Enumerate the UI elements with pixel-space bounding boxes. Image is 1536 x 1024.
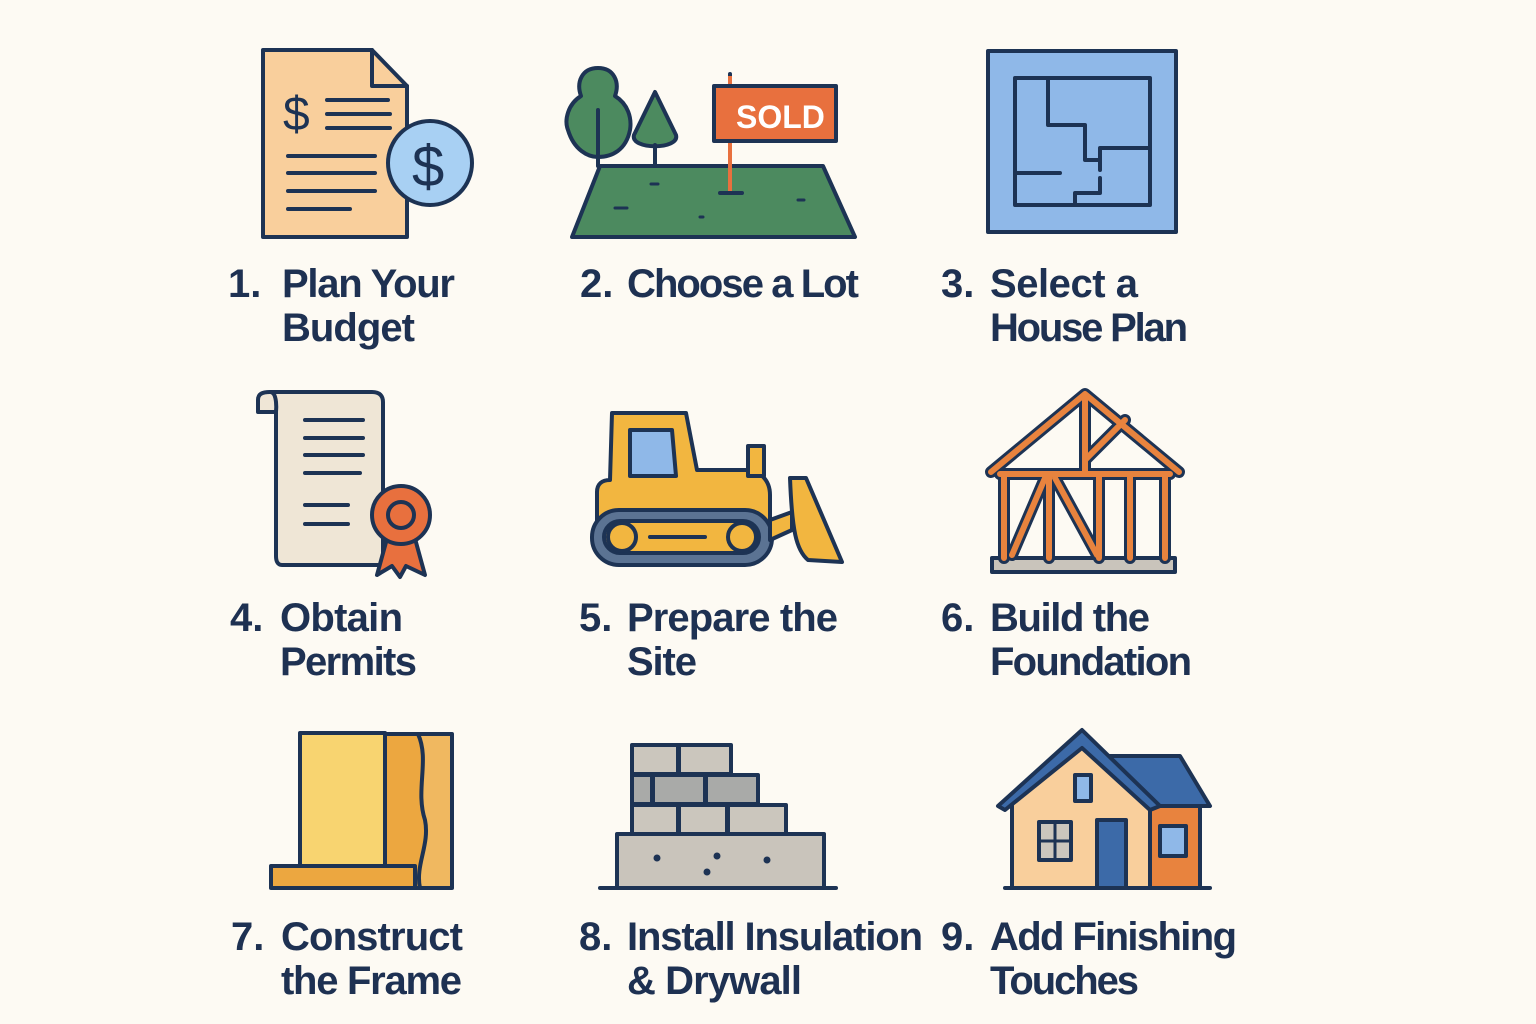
- label: step 4: Obtain: [280, 596, 403, 640]
- label: step 6: Build the: [990, 596, 1150, 640]
- label: step 8: & Drywall: [627, 959, 802, 1003]
- icon: budget document: $: [283, 88, 310, 141]
- icon: house frame: [991, 394, 1179, 572]
- label: step 4: 4.: [230, 596, 263, 640]
- label: step 6: Foundation: [990, 640, 1192, 684]
- label: step 9: Add Finishing: [990, 915, 1237, 959]
- label: step 1: [228, 262, 455, 350]
- label: step 3: 3.: [941, 262, 974, 306]
- label: step 6: [941, 596, 1192, 684]
- label: step 7: the Frame: [281, 959, 462, 1003]
- label: step 8: Install Insulation: [627, 915, 923, 959]
- icon: budget document: [263, 50, 472, 237]
- label: step 9: Touches: [990, 959, 1139, 1003]
- label: step 3: [941, 262, 1188, 350]
- label: step 5: Prepare the: [627, 596, 838, 640]
- icon: bulldozer: [592, 413, 842, 565]
- label: step 9: [941, 915, 1237, 1003]
- label: step 5: Site: [627, 640, 697, 684]
- label: step 7: Construct: [281, 915, 463, 959]
- label: step 1: Budget: [282, 306, 415, 350]
- icon: house plan: [988, 51, 1176, 232]
- label: step 9: 9.: [941, 915, 974, 959]
- label: step 3: Select a: [990, 262, 1139, 306]
- label: step 5: 5.: [579, 596, 612, 640]
- label: step 1: 1.: [228, 262, 261, 306]
- icon: lot with sold sign: SOLD: [736, 99, 825, 135]
- icon: insulation panels: [271, 733, 452, 888]
- icon: permit scroll: [258, 392, 430, 577]
- label: step 2: 2.: [580, 262, 613, 306]
- label: step 7: 7.: [231, 915, 264, 959]
- label: step 8: 8.: [579, 915, 612, 959]
- icon: lot with sold sign: [567, 68, 855, 237]
- label: step 2: Choose a Lot: [627, 262, 859, 306]
- label: step 4: Permits: [280, 640, 417, 684]
- icon: brick wall: [600, 745, 836, 888]
- label: step 6: 6.: [941, 596, 974, 640]
- label: step 8: [579, 915, 923, 1003]
- label: step 4: [230, 596, 417, 684]
- icon: budget document: $: [412, 134, 444, 199]
- label: step 5: [579, 596, 838, 684]
- label: step 7: [231, 915, 463, 1003]
- label: step 1: Plan Your: [282, 262, 455, 306]
- icon: finished house: [998, 730, 1210, 888]
- label: step 3: House Plan: [990, 306, 1188, 350]
